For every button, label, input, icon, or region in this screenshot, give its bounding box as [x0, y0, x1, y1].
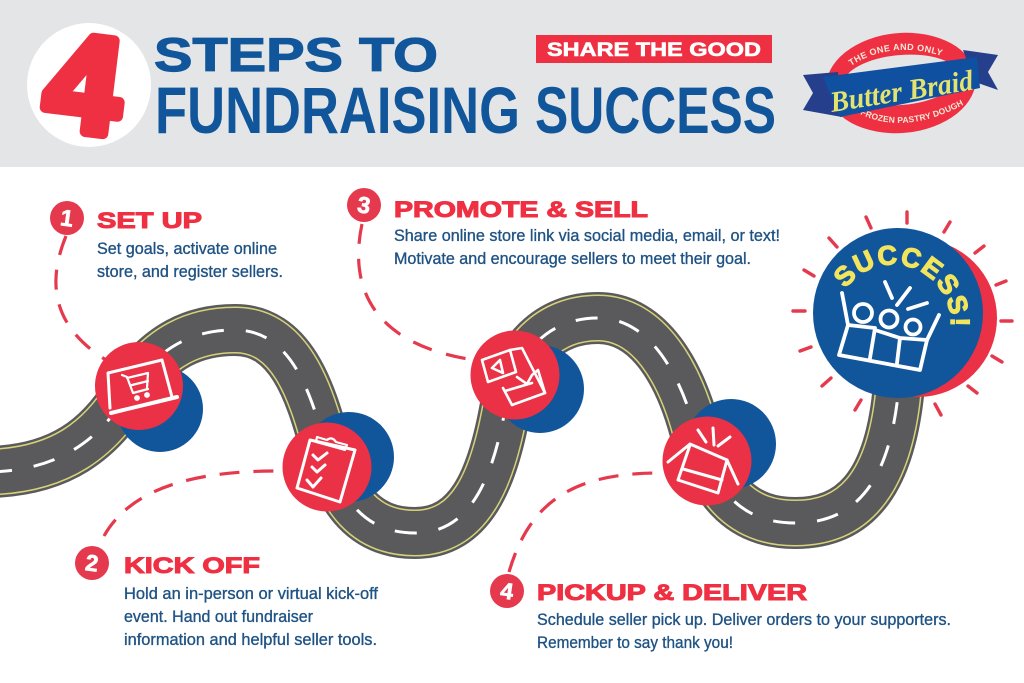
- marker: box: [662, 399, 776, 506]
- title: SUCCESS: [535, 73, 776, 147]
- dashed route: step 2: [104, 471, 284, 536]
- text: [537, 610, 951, 652]
- title: STEPS TO: [154, 28, 438, 81]
- marker: laptop: [95, 342, 203, 452]
- heading: PROMOTE & SELL: [394, 197, 648, 222]
- text: Schedule seller pick up. Deliver orders to your supporters.: [537, 610, 951, 629]
- logo: Butter Braid: THE ONE AND ONLY: [848, 44, 943, 65]
- badge 3: 3: [356, 191, 372, 219]
- icon: open box: [668, 428, 738, 493]
- success sign: [791, 210, 1014, 417]
- icon: laptop with cart: [108, 360, 177, 413]
- text: Hold an in-person or virtual kick-off: [124, 584, 378, 603]
- text: [124, 584, 378, 649]
- logo: Butter Braid: [803, 32, 998, 134]
- step 2: [75, 546, 378, 649]
- text: [97, 239, 283, 281]
- text: event. Hand out fundraiser: [124, 607, 313, 626]
- rays: [793, 212, 1012, 415]
- logo: Butter Braid: FROZEN PASTRY DOUGH: [860, 100, 964, 123]
- badge 1: [50, 201, 84, 235]
- icon: group of people in box: [839, 282, 939, 370]
- text: information and helpful seller tools.: [124, 630, 377, 649]
- step 4: [490, 574, 951, 652]
- badge 2: 2: [84, 549, 100, 577]
- heading: KICK OFF: [124, 553, 260, 578]
- icon: big number 4: 4: [37, 4, 131, 164]
- header band: [0, 0, 1024, 167]
- dashed route: step 4: [509, 473, 665, 572]
- badge 4: [490, 574, 524, 608]
- road: [0, 318, 899, 533]
- title: FUNDRAISING: [155, 73, 520, 147]
- title: [154, 28, 776, 147]
- marker: promote: [470, 330, 584, 433]
- text: Share online store link via social media, email, or text!: [394, 226, 780, 245]
- badge 4: 4: [499, 577, 515, 605]
- icon: checklist clipboard: [297, 437, 355, 502]
- tagline badge: [536, 35, 772, 63]
- text: [394, 226, 780, 268]
- step 3: [347, 188, 780, 268]
- heading: PICKUP & DELIVER: [537, 580, 807, 605]
- heading: SET UP: [97, 208, 202, 233]
- text: store, and register sellers.: [97, 262, 283, 281]
- logo: Butter Braid: Butter Braid: [827, 65, 976, 119]
- marker: clipboard: [282, 412, 394, 512]
- badge 3: [347, 188, 381, 222]
- badge 2: [75, 546, 109, 580]
- success sign: SUCCESS!: [834, 245, 970, 324]
- text: Remember to say thank you!: [537, 633, 733, 652]
- dashed route: step 1: [56, 236, 106, 360]
- tagline badge: SHARE THE GOOD: [547, 40, 761, 61]
- badge 1: 1: [59, 204, 75, 232]
- text: Set goals, activate online: [97, 239, 277, 258]
- dashed route: step 3: [359, 224, 474, 360]
- text: Motivate and encourage sellers to meet their goal.: [394, 249, 751, 268]
- icon: phone and megaphone: [482, 348, 545, 405]
- step 1: [50, 201, 283, 281]
